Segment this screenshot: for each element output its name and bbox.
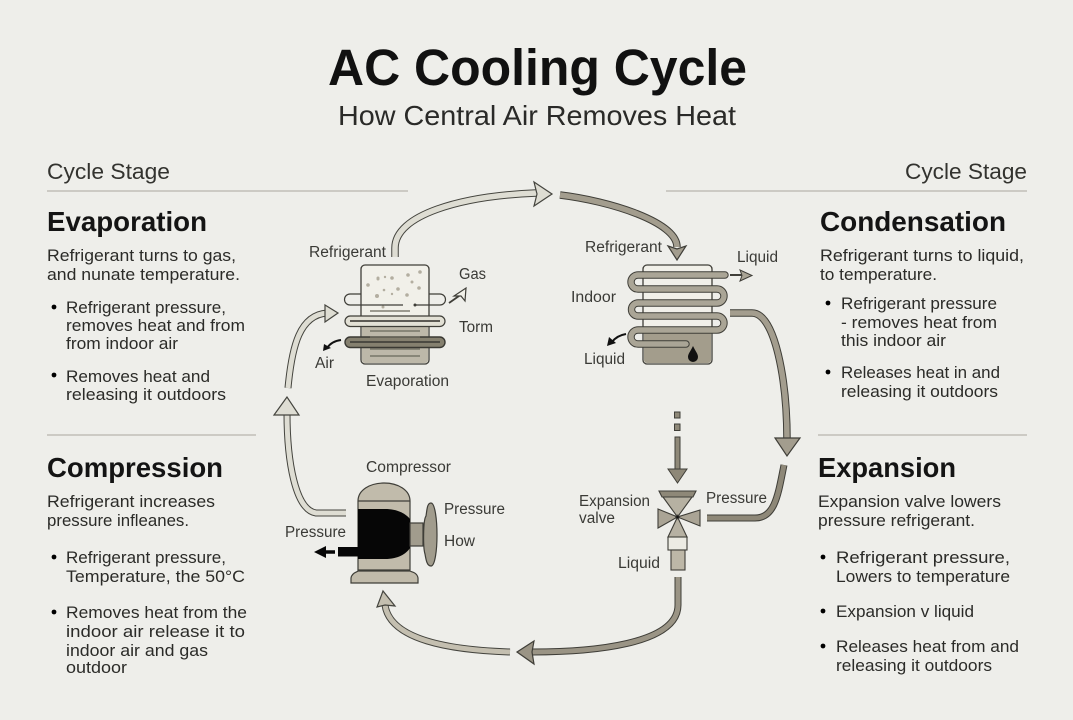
- icon: air arrow: [323, 340, 341, 351]
- arrow: condenser to expansion: [730, 313, 800, 456]
- subtitle: How Central Air Removes Heat: [338, 100, 736, 131]
- panel: evaporation: [47, 159, 408, 404]
- icon: evaporator: [344, 265, 446, 364]
- panel: evaporation: Evaporation: [47, 206, 207, 237]
- diagram labels: Evaporation: [366, 373, 449, 390]
- panel: compression: indoor air release it to: [66, 623, 245, 641]
- panel: condensation: Condensation: [820, 206, 1006, 237]
- diagram labels: Refrigerant: [585, 239, 663, 256]
- panel: evaporation: Refrigerant pressure,: [66, 299, 226, 317]
- panel: compression: Refrigerant pressure,: [66, 549, 226, 567]
- diagram labels: Compressor: [366, 459, 451, 476]
- icon: gas arrow: [449, 288, 466, 303]
- panel: expansion: [818, 435, 1027, 675]
- panel: expansion: releasing it outdoors: [836, 657, 992, 675]
- panel: condensation: this indoor air: [841, 332, 947, 350]
- panel: condensation: Refrigerant turns to liquid,: [820, 247, 1024, 265]
- arrow: into compressor: [377, 591, 510, 652]
- panel: evaporation: removes heat and from: [66, 317, 245, 335]
- title: AC Cooling Cycle: [328, 39, 747, 96]
- icon: condenser: [631, 265, 725, 364]
- diagram labels: Torm: [459, 319, 493, 336]
- diagram labels: Pressure: [444, 501, 505, 518]
- panel: evaporation: from indoor air: [66, 335, 179, 353]
- diagram labels: [285, 239, 778, 572]
- diagram labels: Refrigerant: [309, 244, 387, 261]
- diagram labels: valve: [579, 510, 615, 527]
- panel: compression: outdoor: [66, 659, 128, 677]
- panel: condensation: [666, 159, 1027, 401]
- diagram labels: Liquid: [737, 249, 778, 266]
- arrow: dashed feed to valve: [668, 412, 687, 483]
- panel: compression: Removes heat from the: [66, 604, 247, 622]
- diagram labels: Pressure: [706, 490, 767, 507]
- panel: evaporation: releasing it outdoors: [66, 386, 226, 404]
- panel: condensation: releasing it outdoors: [841, 383, 998, 401]
- icon: compressor outlet arrow: [314, 546, 335, 558]
- panel: condensation: Refrigerant pressure: [841, 295, 997, 313]
- panel: expansion: pressure refrigerant.: [818, 512, 975, 530]
- panel: expansion: Releases heat from and: [836, 638, 1019, 656]
- panel: condensation: - removes heat from: [841, 314, 997, 332]
- panel: expansion: Expansion valve lowers: [818, 493, 1001, 511]
- diagram labels: Gas: [459, 266, 486, 283]
- arrow: compressor upward: [274, 397, 346, 513]
- arrow: into condenser: [560, 195, 686, 260]
- panel: expansion: Lowers to temperature: [836, 568, 1010, 586]
- panel: compression: Refrigerant increases: [47, 493, 215, 511]
- panel: expansion: Expansion: [818, 452, 956, 483]
- icon: compressor: [338, 483, 437, 583]
- icon: liquid drip arrow: [607, 334, 626, 346]
- arrow: evaporator to condenser: [395, 182, 552, 257]
- arrow: valve to compressor: [517, 577, 678, 664]
- panel: compression: [47, 435, 256, 677]
- panel: condensation: Cycle Stage: [905, 159, 1027, 184]
- panel: evaporation: Removes heat and: [66, 368, 210, 386]
- panel: compression: indoor air and gas: [66, 642, 208, 660]
- panel: compression: pressure infleanes.: [47, 512, 189, 530]
- panel: condensation: Releases heat in and: [841, 364, 1000, 382]
- panel: evaporation: and nunate temperature.: [47, 266, 240, 284]
- diagram labels: Pressure: [285, 524, 346, 541]
- diagram labels: Indoor: [571, 289, 616, 306]
- panel: compression: Temperature, the 50°C: [66, 568, 245, 586]
- panel: compression: Compression: [47, 452, 223, 483]
- panel: condensation: to temperature.: [820, 266, 937, 284]
- diagram labels: Liquid: [584, 351, 625, 368]
- arrow: pipe into expansion valve: [707, 465, 784, 518]
- arrow: into evaporator: [288, 305, 338, 388]
- diagram labels: Expansion: [579, 493, 650, 510]
- icon: liquid outflow arrow: [730, 270, 752, 281]
- diagram labels: Air: [315, 355, 334, 372]
- diagram labels: How: [444, 533, 476, 550]
- diagram labels: Liquid: [618, 555, 660, 572]
- panel: expansion: Refrigerant pressure,: [836, 549, 1010, 567]
- icon: expansion valve: [658, 491, 700, 570]
- panel: evaporation: Refrigerant turns to gas,: [47, 247, 236, 265]
- panel: evaporation: Cycle Stage: [47, 159, 170, 184]
- panel: expansion: Expansion v liquid: [836, 603, 974, 621]
